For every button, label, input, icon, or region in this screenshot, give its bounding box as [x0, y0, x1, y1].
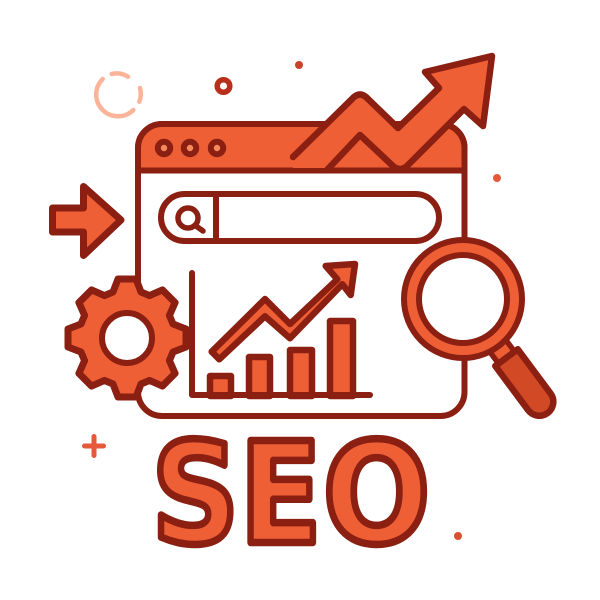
- title: SEO: O: [323, 413, 430, 576]
- chart axes: [192, 273, 370, 395]
- magnifier handle: [495, 349, 559, 421]
- decoration: dot top: [295, 61, 303, 69]
- magnifier lens: [419, 255, 507, 343]
- gear body: [68, 279, 186, 397]
- window header bar: [138, 124, 464, 170]
- gear hole: [102, 313, 152, 363]
- search divider: [213, 194, 219, 241]
- decoration: dashed circle: [96, 73, 141, 116]
- window control dots: [158, 142, 223, 154]
- search bar: [161, 194, 439, 241]
- gear: [68, 279, 186, 397]
- browser window: [138, 124, 464, 416]
- chart bars: [210, 321, 353, 396]
- window frame: [138, 124, 464, 416]
- magnifier ring: [404, 240, 522, 358]
- decoration: small ring: [217, 80, 230, 92]
- growth arrow outline: [293, 56, 492, 170]
- title: SEO: [152, 412, 430, 576]
- decoration: plus: [84, 436, 104, 456]
- growth arrow on header: [293, 56, 492, 169]
- chart trend arrow: [212, 264, 355, 359]
- magnifier neck: [489, 339, 516, 365]
- magnifying glass: [404, 240, 559, 421]
- bar chart: [192, 264, 370, 396]
- decoration: dot right: [493, 174, 501, 182]
- decoration: dot bottom: [454, 532, 462, 540]
- search icon: [178, 208, 203, 231]
- arrow pointing right: [52, 186, 121, 256]
- title: SEO: S: [152, 412, 239, 576]
- title: SEO: E: [240, 413, 322, 576]
- search field: [161, 194, 439, 241]
